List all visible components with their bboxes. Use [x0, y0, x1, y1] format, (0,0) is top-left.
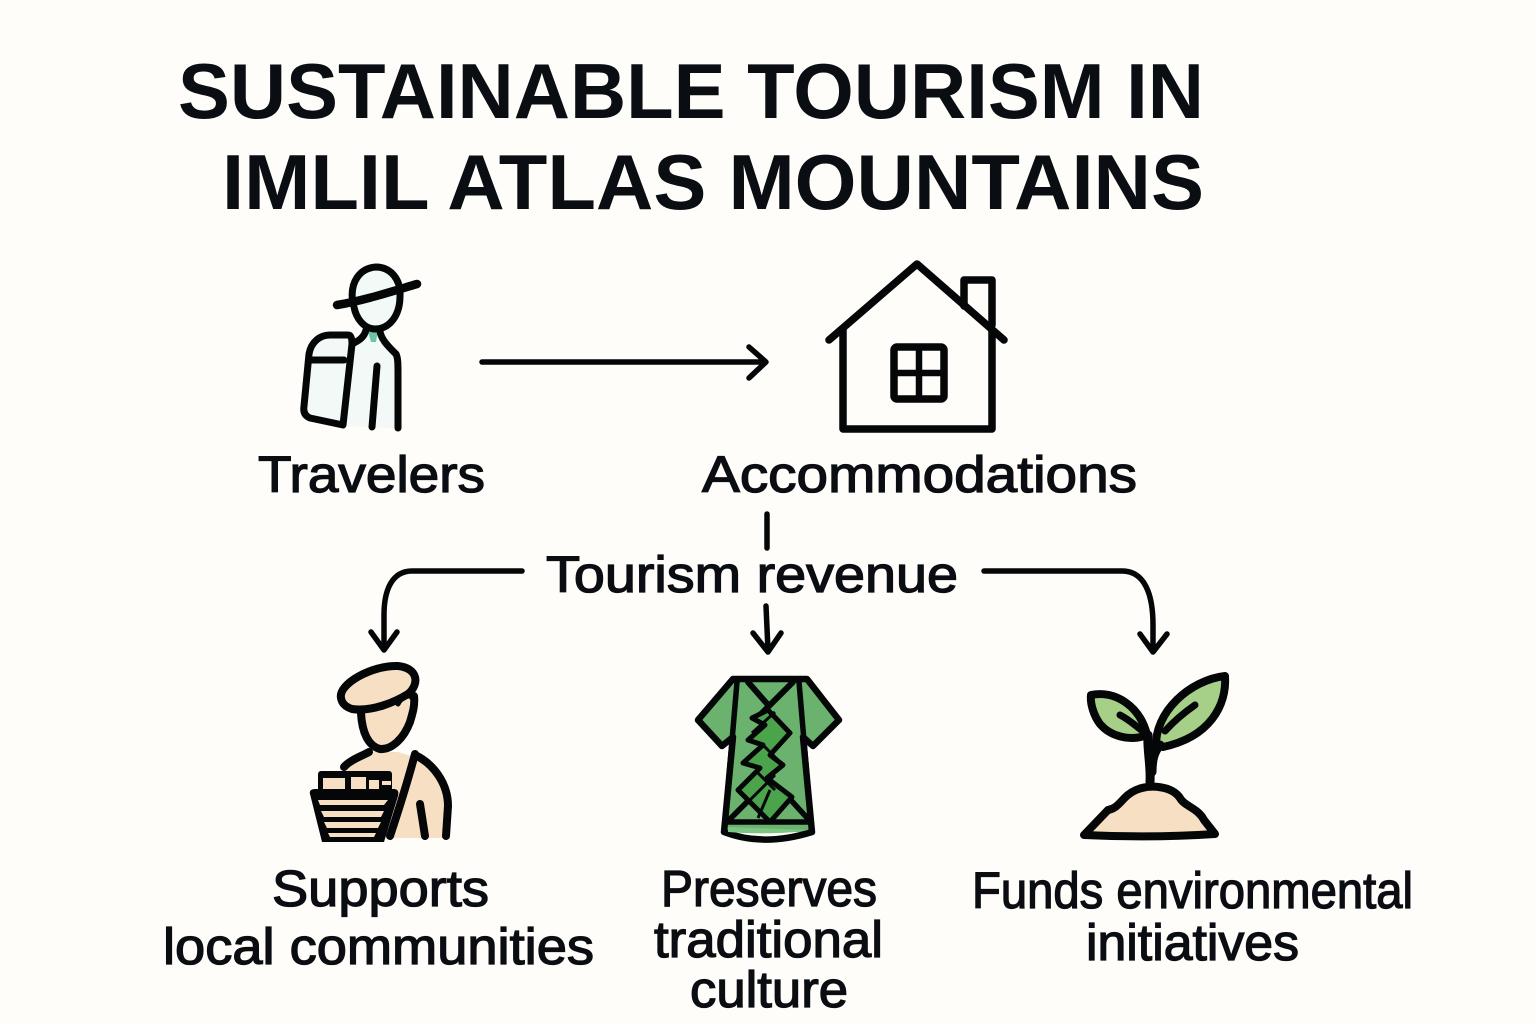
label: accommodations: Accommodations [702, 446, 1137, 503]
title [178, 47, 1204, 226]
basket goods [318, 771, 392, 794]
label: funds environmental initiatives [972, 862, 1413, 971]
arrow: revenue to culture [753, 606, 781, 652]
label: travelers: Travelers [258, 446, 485, 503]
label: funds environmental initiatives: initiatives [1086, 914, 1299, 971]
label: supports local communities: Supports [272, 860, 489, 917]
label: preserves traditional culture [654, 860, 883, 1018]
icon: traveler with backpack and hat [304, 267, 417, 428]
basket [310, 789, 398, 842]
icon: traditional green garment [698, 679, 839, 840]
icon: local vendor with basket [310, 666, 448, 842]
icon: seedling in soil [1084, 676, 1225, 836]
connector: accommodations to revenue [764, 514, 770, 548]
arrow: revenue to communities [371, 571, 522, 650]
arrow: revenue to environment [984, 571, 1167, 652]
icon: house [829, 264, 1004, 429]
label: supports local communities: local communities [163, 918, 594, 975]
label: preserves traditional culture: culture [690, 961, 848, 1018]
title: IMLIL ATLAS MOUNTAINS [222, 138, 1204, 226]
label: funds environmental initiatives: Funds environmental [972, 862, 1413, 919]
label: supports local communities [163, 860, 594, 975]
title: SUSTAINABLE TOURISM IN [178, 47, 1204, 135]
arrow: travelers to accommodations [482, 347, 766, 378]
label: preserves traditional culture: traditional [654, 911, 883, 968]
garment diamond pattern [738, 710, 792, 822]
label: tourism revenue: Tourism revenue [546, 546, 958, 603]
label: preserves traditional culture: Preserves [661, 860, 877, 917]
